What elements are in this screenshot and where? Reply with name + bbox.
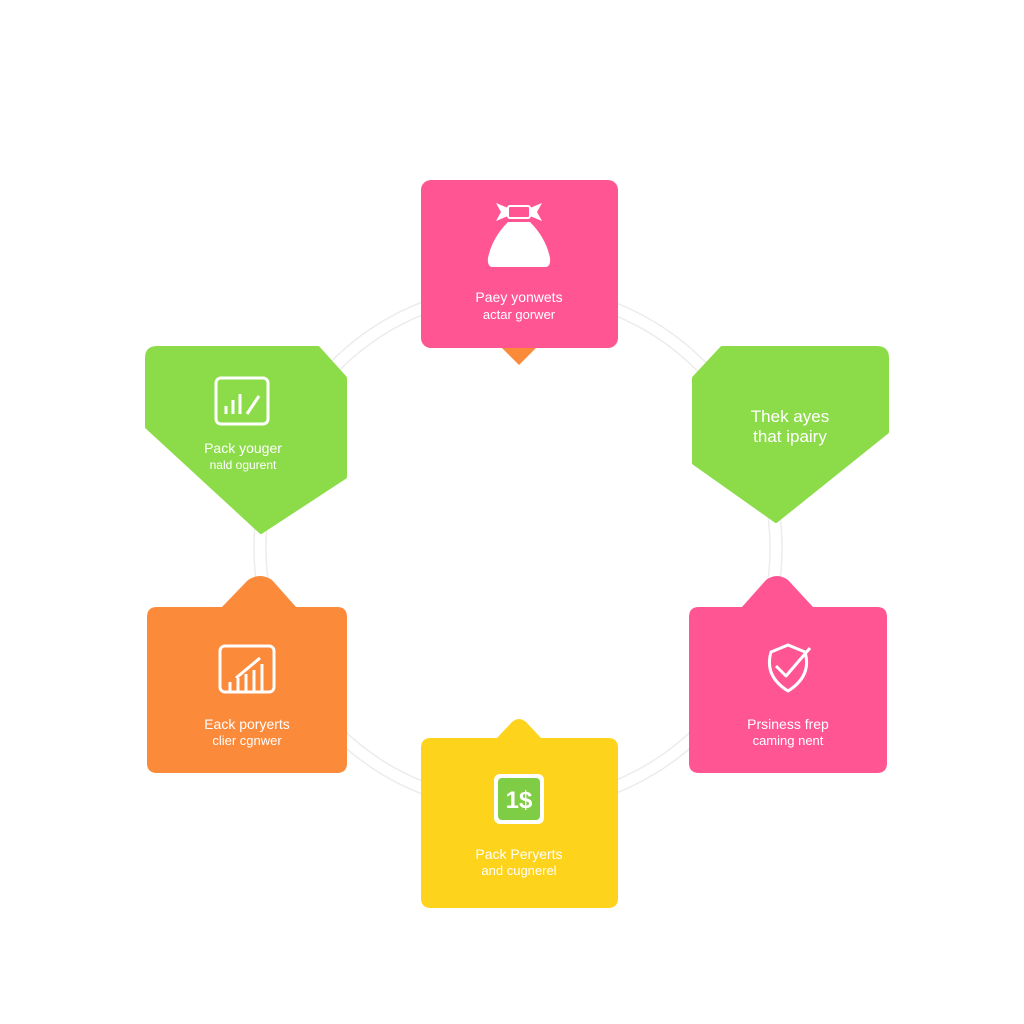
pointer: orange triangle xyxy=(500,346,538,365)
panel: bottom-right pink: caming nent xyxy=(753,733,824,748)
panel: bottom yellow: Pack Peryerts xyxy=(475,846,563,862)
icon: dollar xyxy=(494,774,544,824)
text: Paey yonwets xyxy=(475,289,563,305)
panel: top pink xyxy=(421,180,618,365)
panel: left green: nald ogurent xyxy=(210,458,277,472)
panel: bottom-left orange: Eack poryerts xyxy=(204,716,290,732)
icon: bag xyxy=(488,203,550,267)
icon: growth chart xyxy=(220,646,274,692)
icon: chart xyxy=(216,378,268,424)
panel: right green: that ipairy xyxy=(753,427,827,446)
icon: dollar: 1$ xyxy=(506,787,533,814)
panel: right green: Thek ayes xyxy=(751,407,829,426)
panel: bottom yellow: and cugnerel xyxy=(481,863,557,878)
panel: left green: Pack youger xyxy=(204,440,282,456)
panel: bottom-right pink xyxy=(689,576,887,773)
panel: right green xyxy=(694,348,887,521)
panel: left green xyxy=(147,348,345,532)
icon: shield check xyxy=(769,645,810,691)
ring connector xyxy=(254,284,782,812)
panel: bottom-right pink: Prsiness frep xyxy=(747,716,829,732)
panel: bottom-left orange xyxy=(147,576,347,773)
panel: top pink: actar gorwer xyxy=(483,307,556,322)
panel: bottom yellow xyxy=(421,719,618,908)
panel: bottom-left orange: clier cgnwer xyxy=(212,733,282,748)
